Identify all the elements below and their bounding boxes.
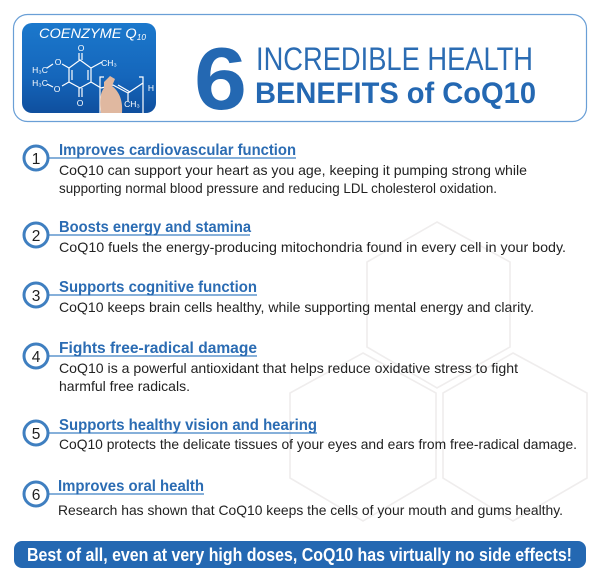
- benefit 5: [24, 417, 577, 452]
- molecule image: COENZYME Q: [39, 25, 133, 41]
- molecule image: [22, 23, 156, 113]
- benefit 4: [24, 340, 518, 394]
- header panel: [14, 14, 586, 128]
- benefit 1: [24, 142, 527, 196]
- benefit 3: [24, 279, 534, 315]
- benefit 2: CoQ10 fuels the energy-producing mitochondria found in every cell in your body.: [59, 239, 566, 255]
- benefit 6: 6: [32, 487, 40, 504]
- benefit 3: CoQ10 keeps brain cells healthy, while supporting mental energy and clarity.: [59, 299, 534, 315]
- molecule image: O: [55, 57, 62, 67]
- molecule image: H₃C: [32, 78, 48, 88]
- title line 2: BENEFITS of CoQ10: [255, 77, 536, 110]
- benefit 1: Improves cardiovascular function: [59, 142, 296, 159]
- benefit 4: 4: [32, 349, 41, 366]
- benefit 5: 5: [32, 426, 40, 443]
- molecule image: O: [54, 84, 61, 94]
- benefit 5: Supports healthy vision and hearing: [59, 417, 317, 434]
- molecule image: O: [78, 43, 85, 53]
- benefit 1: 1: [32, 151, 40, 168]
- molecule image: CH₃: [124, 99, 140, 109]
- benefit 2: 2: [32, 228, 40, 245]
- benefit 3: Supports cognitive function: [59, 279, 257, 296]
- molecule image: 10: [137, 33, 147, 42]
- benefit 6: [24, 478, 563, 518]
- benefit 1: supporting normal blood pressure and reducing LDL cholesterol oxidation.: [59, 180, 497, 196]
- benefit 4: harmful free radicals.: [59, 378, 190, 394]
- benefit 4: CoQ10 is a powerful antioxidant that helps reduce oxidative stress to fight: [59, 360, 518, 376]
- benefit 2: [24, 219, 566, 255]
- molecule image: H₃C: [32, 65, 48, 75]
- big number 6: 6: [194, 29, 247, 128]
- benefit 6: Research has shown that CoQ10 keeps the cells of your mouth and gums healthy.: [58, 502, 563, 518]
- benefit 4: Fights free-radical damage: [59, 340, 257, 357]
- title line 1: INCREDIBLE HEALTH: [256, 41, 533, 77]
- molecule image: CH₃: [101, 58, 117, 68]
- benefit 5: CoQ10 protects the delicate tissues of your eyes and ears from free-radical damage.: [59, 436, 577, 452]
- benefit 6: Improves oral health: [58, 478, 204, 495]
- background hexagons: [290, 222, 587, 521]
- molecule image: H: [148, 83, 154, 93]
- molecule image: O: [77, 98, 84, 108]
- benefit 1: CoQ10 can support your heart as you age, keeping it pumping strong while: [59, 162, 527, 178]
- benefit 3: 3: [32, 288, 40, 305]
- benefit 2: Boosts energy and stamina: [59, 219, 251, 236]
